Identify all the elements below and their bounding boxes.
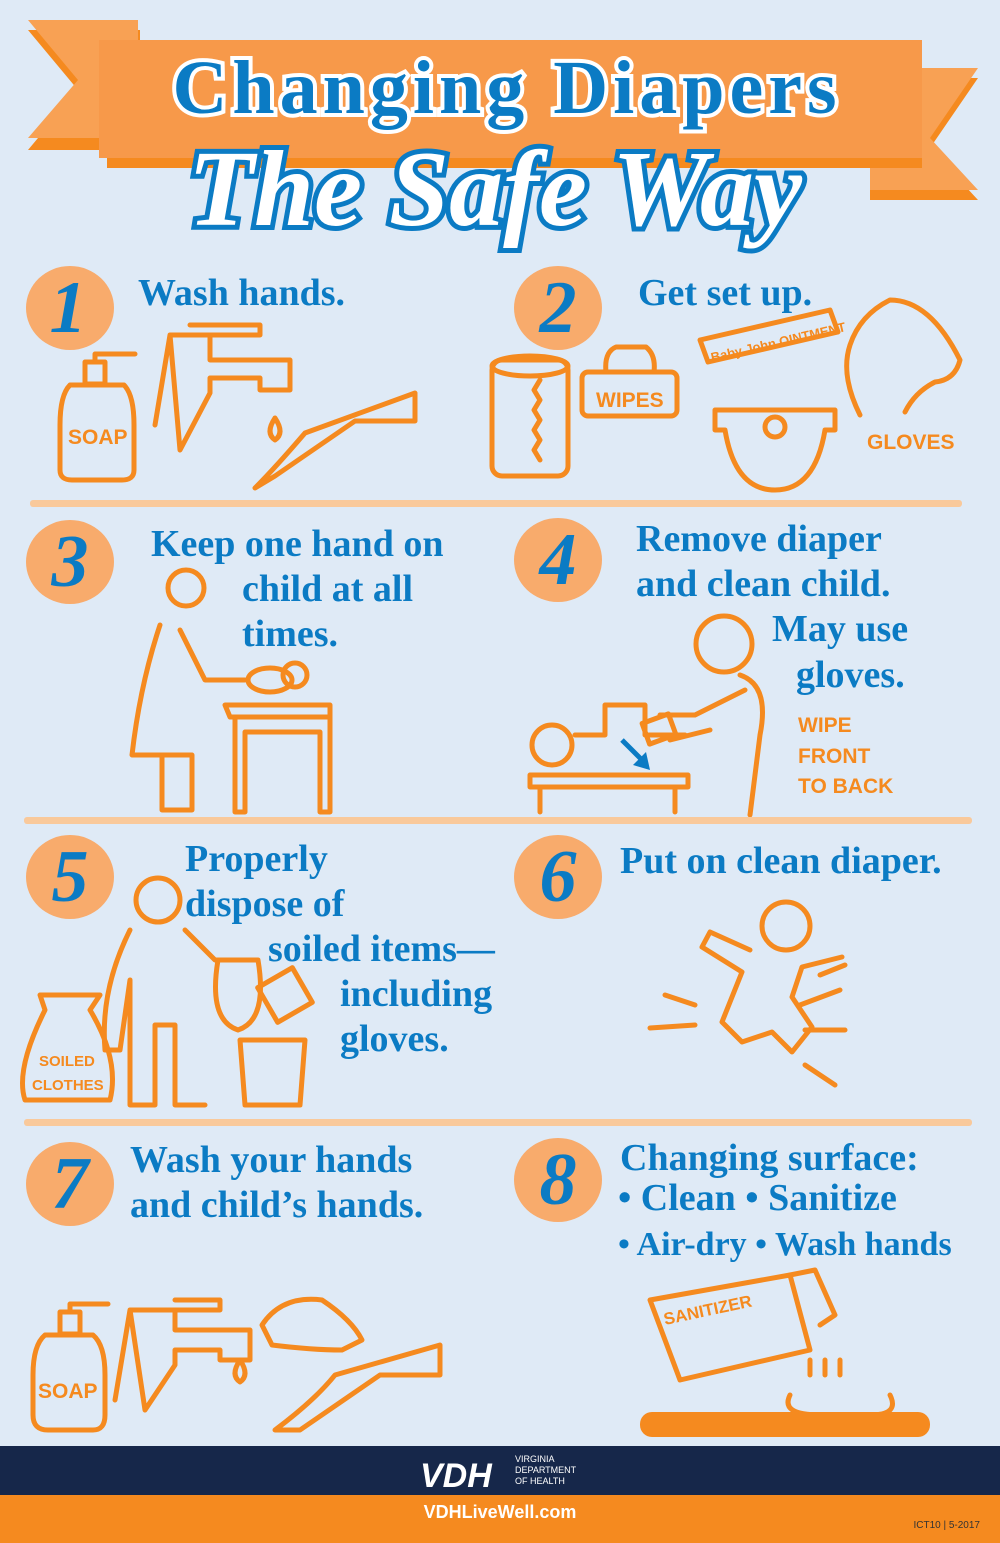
step 4: gloves.: [796, 654, 905, 696]
step 7: [26, 1139, 440, 1430]
footer: VIRGINIA: [515, 1454, 555, 1464]
icon: soap: [60, 354, 135, 480]
step 5: SOILED: [39, 1053, 95, 1070]
step 4: Remove diaper: [636, 518, 882, 560]
step 3: [26, 520, 443, 812]
footer: [0, 1446, 1000, 1543]
step 4: FRONT: [798, 745, 870, 768]
step 8: SANITIZER: [662, 1292, 754, 1329]
step 4: TO BACK: [798, 775, 893, 798]
footer: DEPARTMENT: [515, 1465, 577, 1475]
step 1: 1: [50, 267, 86, 349]
footer: OF HEALTH: [515, 1476, 565, 1486]
step 5: soiled items—: [268, 928, 496, 970]
step 4: May use: [772, 608, 908, 650]
icon: faucet and hand: [155, 325, 415, 488]
step 3: times.: [242, 613, 338, 655]
title banner: [28, 20, 978, 249]
step 2: 2: [538, 267, 576, 349]
step 8: • Clean • Sanitize: [618, 1177, 897, 1219]
step 2: Get set up.: [638, 272, 812, 314]
step 5: including: [340, 973, 492, 1015]
step 5: Properly: [185, 838, 328, 880]
step 5: 5: [52, 836, 88, 918]
step 6: Put on clean diaper.: [620, 840, 942, 882]
step 4: [514, 518, 908, 815]
step 2: WIPES: [596, 389, 664, 412]
step 7: 7: [52, 1143, 92, 1225]
step 2: [492, 266, 960, 490]
step 1: Wash hands.: [138, 272, 345, 314]
footer: ICT10 | 5-2017: [913, 1520, 980, 1531]
step 7: SOAP: [38, 1380, 98, 1403]
step 4: WIPE: [798, 714, 852, 737]
step 2: GLOVES: [867, 431, 955, 454]
subtitle: The Safe Way: The Safe Way: [188, 130, 803, 249]
step 6: 6: [540, 836, 576, 918]
step 7: and child’s hands.: [130, 1184, 423, 1226]
step 5: [22, 835, 496, 1105]
step 8: [514, 1137, 952, 1437]
step 8: 8: [540, 1139, 576, 1221]
step 4: and clean child.: [636, 563, 890, 605]
step 5: dispose of: [185, 883, 346, 925]
step 5: CLOTHES: [32, 1077, 104, 1094]
step 8: • Air-dry • Wash hands: [618, 1226, 952, 1263]
step 2: Baby John OINTMENT: [709, 319, 847, 365]
title: Changing Diapers: Changing Diapers: [172, 46, 842, 130]
step 6: [514, 835, 942, 1085]
footer: VDH: [420, 1457, 493, 1495]
step 3: 3: [50, 521, 88, 603]
step 1: SOAP: [68, 426, 128, 449]
step 5: gloves.: [340, 1018, 449, 1060]
step 3: child at all: [242, 568, 413, 610]
step 8: Changing surface:: [620, 1137, 919, 1179]
step 1: [26, 266, 415, 488]
step 4: 4: [538, 519, 576, 601]
step 7: Wash your hands: [130, 1139, 412, 1181]
footer: VDHLiveWell.com: [424, 1502, 576, 1522]
step 3: Keep one hand on: [151, 523, 443, 565]
